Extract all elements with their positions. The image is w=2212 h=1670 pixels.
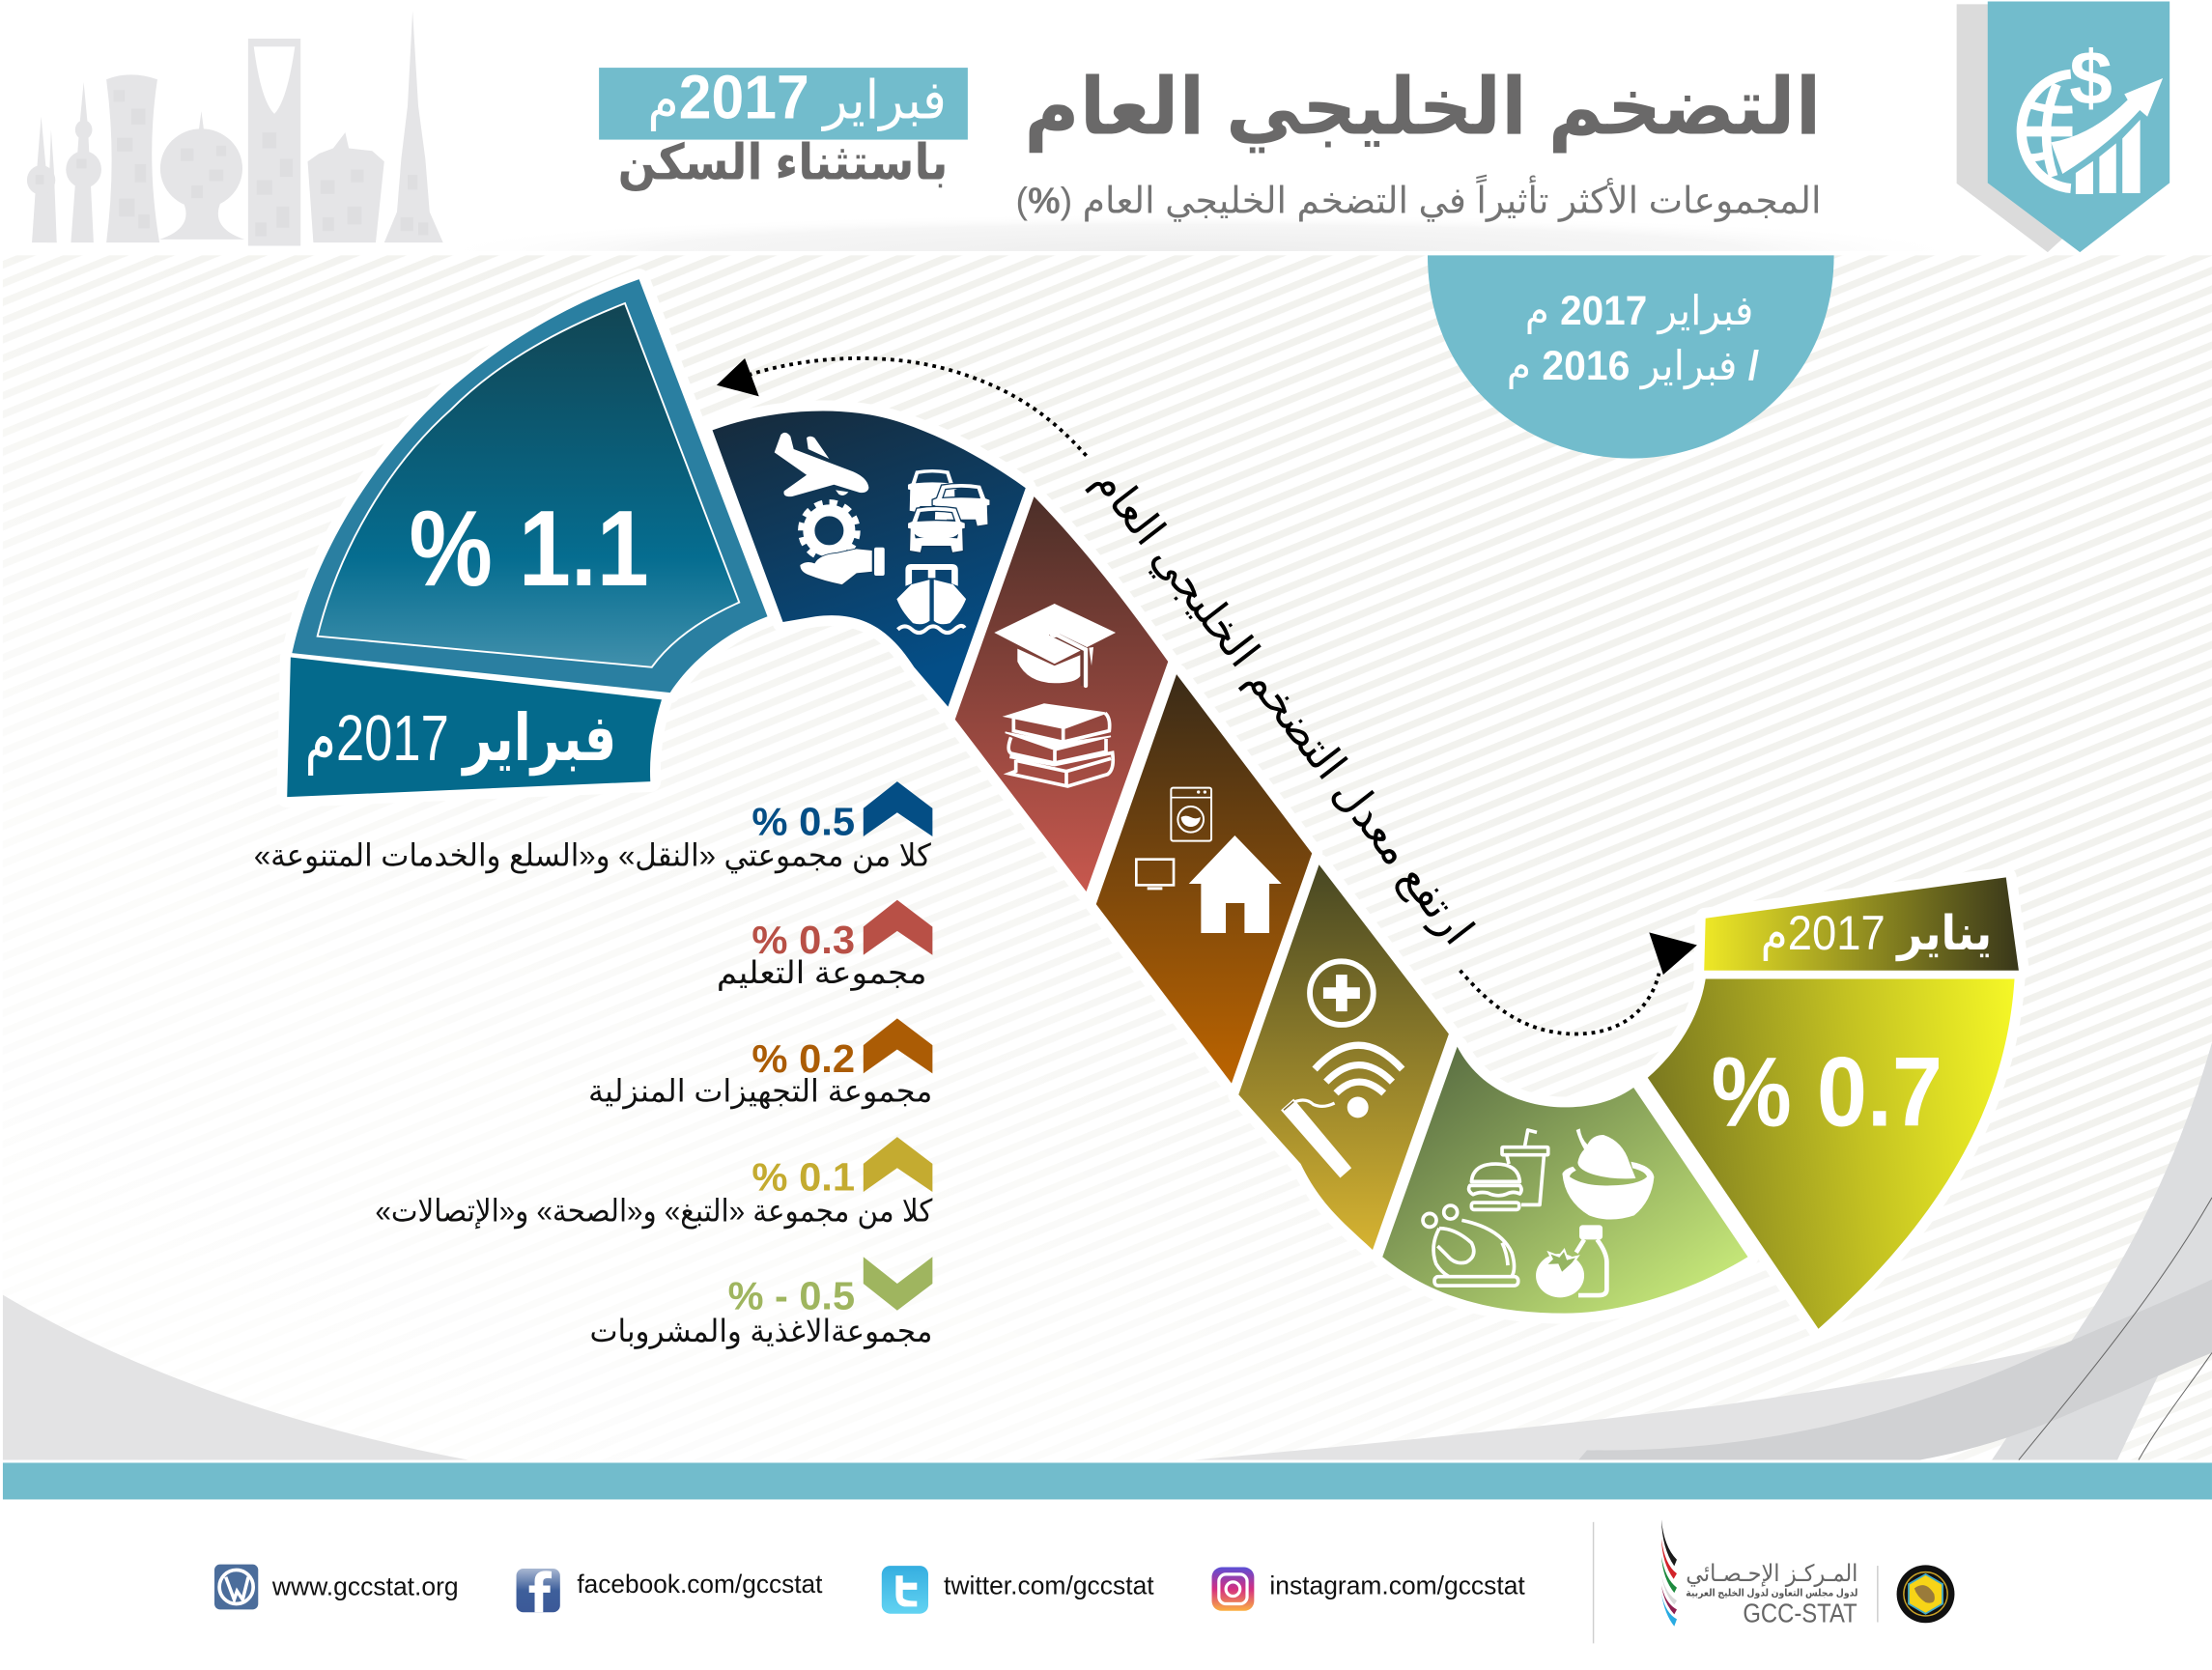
legend row: tobacco health communications: كلا من مجموعة «التبغ» و«الصحة» و«الإتصالات» [375, 1194, 933, 1230]
arrow: top dotted [717, 358, 1087, 456]
logo ribbon [1661, 1519, 1677, 1627]
legend row: transport: % 0.5 [752, 800, 855, 844]
logo arabic subtitle: لدول مجلس التعاون لدول الخليج العربية [1686, 1588, 1858, 1599]
panel: January 2017: % 0.7 [1712, 1035, 1943, 1146]
footer link: instagram [1212, 1568, 1525, 1611]
logo arabic name: المـركـز الإحـصـائي [1686, 1561, 1858, 1587]
footer link: twitter: twitter.com/gccstat [944, 1571, 1154, 1599]
tower one [27, 117, 57, 242]
panel: January label [1704, 877, 2019, 971]
arrow: bottom dotted [1460, 932, 1697, 1033]
shield badge [1988, 1, 2169, 252]
twisted tower [106, 74, 159, 242]
icon: gear in hand [800, 503, 885, 584]
legend row: household [588, 1018, 932, 1110]
subtitle: المجموعات الأكثر تأثيراً في التضخم الخليجي العام (%) [1016, 174, 1821, 223]
striped background [3, 255, 2212, 1460]
segment: tobacco, health, communications [1238, 864, 1449, 1250]
tower two [66, 82, 101, 242]
footer link: instagram: instagram.com/gccstat [1269, 1571, 1525, 1599]
icon: tomato and bottle [1536, 1225, 1606, 1297]
GCC emblem [1897, 1565, 1954, 1623]
legend row: transport: كلا من مجموعتي «النقل» و«السلع والخدمات المتنوعة» [254, 838, 932, 874]
footer divider [1593, 1522, 1594, 1643]
icon: stack of books [1006, 704, 1113, 786]
footer link: website [214, 1565, 459, 1609]
footer link: twitter [882, 1566, 1154, 1614]
teal comparison badge: / فبراير 2016 م [1507, 343, 1759, 389]
burj [384, 11, 443, 242]
segment: education [955, 496, 1168, 892]
icon: wifi [1315, 1045, 1403, 1118]
icon: medical plus [1310, 961, 1374, 1025]
teal comparison badge [1428, 255, 1834, 459]
legend row: food: % - 0.5 [728, 1273, 855, 1317]
legend row: education: مجموعة التعليم [717, 955, 927, 991]
panel: February 2017 [292, 279, 767, 693]
legend row: education: % 0.3 [752, 918, 855, 962]
logo latin name: GCC-STAT [1743, 1598, 1858, 1628]
footer link: facebook [517, 1569, 823, 1612]
date banner: فبراير 2017م [647, 63, 947, 132]
skyline [27, 11, 443, 245]
panel: February label: فبراير 2017م [304, 702, 616, 777]
header gradient band [423, 177, 1975, 251]
rotated caption: ارتفع معدل التضخم الخليجي العام [1083, 457, 1484, 954]
title: التضخم الخليجي العام [1024, 64, 1821, 154]
GCC-STAT logo [1661, 1519, 1879, 1628]
value: % 1.1 [410, 489, 649, 609]
dome monument [159, 111, 244, 240]
cluster [308, 132, 384, 242]
legend row: household: % 0.2 [752, 1036, 855, 1081]
bottom left swoosh [3, 1295, 468, 1460]
legend row: food: مجموعةالاغذية والمشروبات [589, 1314, 932, 1349]
bottom right swooshes [1194, 1042, 2212, 1460]
legend row: tobacco health communications: % 0.1 [752, 1155, 855, 1200]
icon: ship [896, 564, 966, 633]
panel: February label [287, 658, 662, 797]
segment: food and beverages [1382, 1047, 1747, 1314]
teal comparison badge: فبراير 2017 م [1525, 288, 1753, 334]
legend row: transport [254, 781, 932, 874]
footer link: facebook: facebook.com/gccstat [577, 1570, 823, 1599]
icon: bowl and leaf [1562, 1128, 1654, 1220]
legend row: household: مجموعة التجهيزات المنزلية [588, 1074, 932, 1110]
icon: monitor [1136, 860, 1174, 890]
segment: household equipment [1096, 674, 1312, 1084]
panel: January label: يناير 2017م [1761, 906, 1992, 962]
footer link: website: www.gccstat.org [271, 1572, 459, 1601]
white halo behind chain [287, 279, 2019, 1329]
icon: house [1189, 835, 1282, 933]
legend row: food [589, 1257, 932, 1349]
icon: cars [908, 469, 989, 552]
icon: burger and drink [1469, 1130, 1548, 1209]
icon: roast chicken [1423, 1205, 1518, 1286]
segment: transport and miscellaneous [713, 411, 1026, 707]
panel: January 2017 [1648, 979, 2015, 1329]
icon: graduation cap [994, 604, 1116, 686]
legend row: education [717, 900, 932, 991]
icon: globe with dollar and rising arrow [2022, 35, 2163, 194]
icon: cigarette [1281, 1099, 1351, 1177]
shield shadow [1957, 4, 2074, 252]
bottom teal bar [3, 1462, 2212, 1499]
icon: airplane [775, 433, 868, 496]
excluding housing text: باستثناء السكن [618, 134, 948, 191]
kingdom centre [248, 39, 300, 245]
legend row: tobacco health communications [375, 1137, 933, 1230]
icon: globe with dollar and rising arrow: $ [2069, 35, 2113, 120]
icon: washing machine [1171, 788, 1211, 841]
